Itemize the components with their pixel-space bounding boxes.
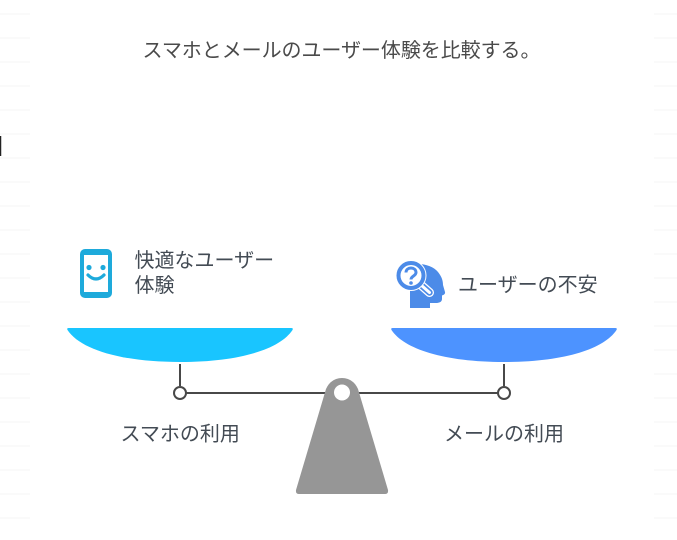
label: email use: メールの利用 (444, 422, 564, 446)
label: comfortable user experience: 体験 (134, 274, 174, 297)
scale beam and hangers (174, 364, 510, 399)
label: user anxiety: ユーザーの不安 (458, 274, 598, 296)
icon: head with magnifying glass (396, 260, 445, 308)
icon: smartphone with smile (80, 249, 112, 298)
right pan (391, 328, 617, 362)
title: スマホとメールのユーザー体験を比較する。 (142, 39, 540, 62)
label: comfortable user experience: 快適なユーザー (134, 249, 274, 272)
scale fulcrum (296, 378, 388, 494)
left pan (67, 328, 293, 362)
label: smartphone use: スマホの利用 (120, 422, 240, 446)
